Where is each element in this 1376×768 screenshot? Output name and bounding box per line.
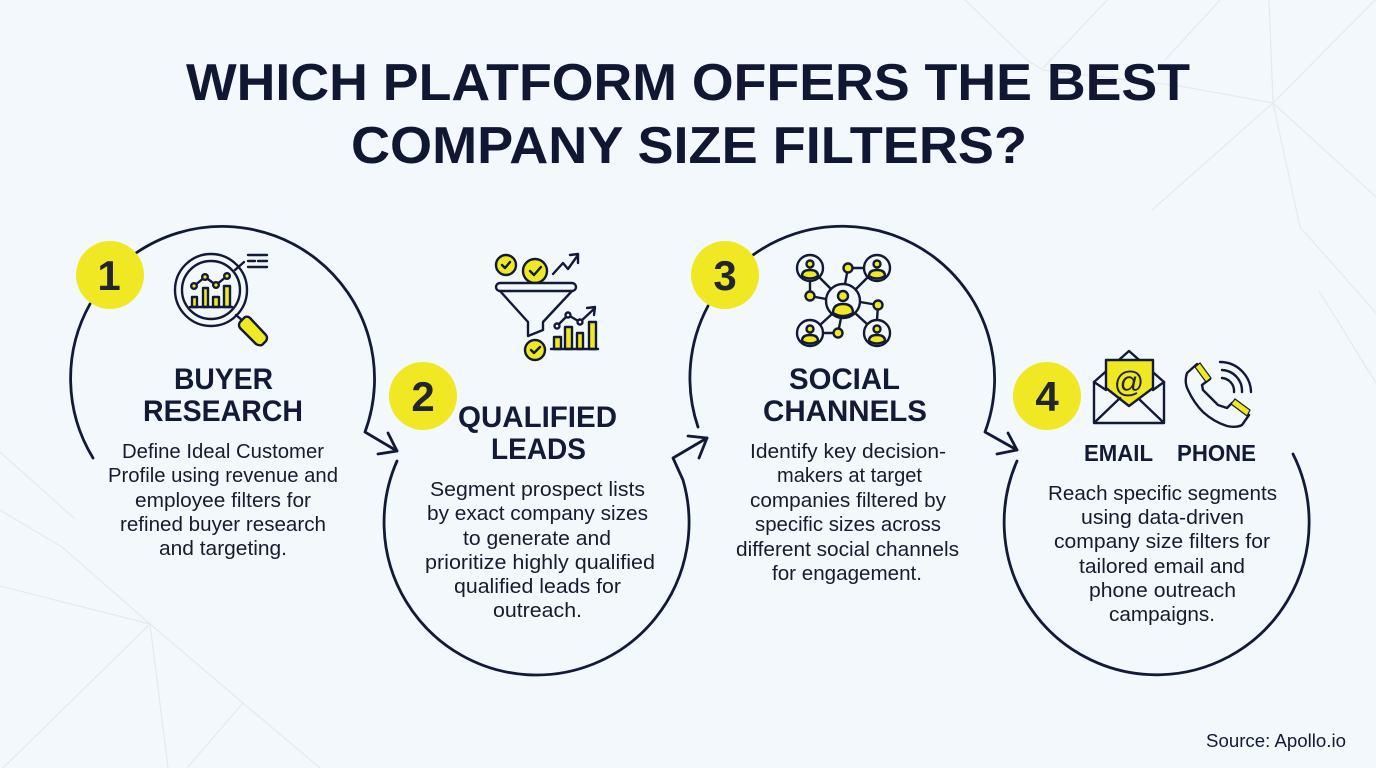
number badge 3: 3 bbox=[713, 252, 737, 299]
heading: buyer research: BUYER bbox=[174, 363, 273, 396]
text: step 4 description: company size filters for bbox=[1054, 530, 1270, 553]
text: step 3 description: companies filtered by bbox=[750, 489, 947, 512]
heading: email and phone: PHONE bbox=[1177, 440, 1256, 466]
icon: magnifier with chart bbox=[175, 254, 267, 345]
heading: buyer research: RESEARCH bbox=[143, 395, 303, 428]
text: step 1 description: employee filters for bbox=[135, 489, 311, 512]
icon: social network bbox=[797, 255, 890, 346]
text: step 4 description: tailored email and bbox=[1079, 555, 1245, 578]
text: step 4 description: campaigns. bbox=[1109, 603, 1215, 626]
heading: social channels: SOCIAL bbox=[789, 363, 900, 396]
title: COMPANY SIZE FILTERS? bbox=[351, 117, 1027, 175]
icon: envelope bbox=[1094, 351, 1164, 423]
number badge 4 bbox=[1013, 362, 1081, 430]
text: step 1 description: and targeting. bbox=[159, 537, 287, 560]
icon: phone bbox=[1186, 362, 1251, 427]
text: step 2 description: prioritize highly qualified bbox=[425, 551, 655, 574]
text: step 2 description: by exact company sizes bbox=[427, 502, 648, 525]
ring arc with arrow to step 4 bbox=[690, 226, 1017, 454]
title bbox=[186, 54, 1190, 175]
text: step 2 description bbox=[425, 478, 655, 622]
panel: step 4 email and phone bbox=[1004, 351, 1309, 675]
heading: qualified leads bbox=[458, 401, 617, 466]
text: step 2 description: to generate and bbox=[463, 527, 611, 550]
heading: email and phone bbox=[1084, 440, 1256, 466]
text: step 2 description: qualified leads for bbox=[454, 575, 621, 598]
text: step 2 description: outreach. bbox=[493, 599, 582, 622]
text: step 3 description: different social channels bbox=[736, 538, 959, 561]
icon: envelope: @ bbox=[1114, 366, 1144, 399]
icon: funnel with chart bbox=[496, 254, 598, 360]
text: step 2 description: Segment prospect lists bbox=[430, 478, 645, 501]
heading: email and phone: EMAIL bbox=[1084, 440, 1153, 466]
source note: Source: Apollo.io bbox=[1206, 731, 1346, 751]
text: step 3 description bbox=[736, 440, 959, 585]
ring arc bbox=[1004, 454, 1309, 675]
heading: social channels: CHANNELS bbox=[763, 395, 927, 428]
text: step 4 description: using data-driven bbox=[1081, 506, 1244, 529]
heading: social channels bbox=[763, 363, 927, 428]
text: step 1 description: refined buyer research bbox=[120, 513, 326, 536]
text: step 3 description: specific sizes across bbox=[755, 513, 941, 536]
number badge 3 bbox=[691, 241, 759, 309]
panel: step 2 qualified leads bbox=[384, 254, 707, 675]
text: step 3 description: makers at target bbox=[777, 464, 922, 487]
text: step 4 description: Reach specific segments bbox=[1048, 482, 1277, 505]
text: step 1 description: Define Ideal Customer bbox=[122, 440, 324, 463]
number badge 4: 4 bbox=[1035, 373, 1059, 420]
text: step 4 description bbox=[1048, 482, 1277, 626]
text: step 3 description: Identify key decision- bbox=[750, 440, 946, 463]
ring arc with arrow to step 2 bbox=[71, 226, 397, 458]
number badge 2: 2 bbox=[411, 373, 435, 420]
number badge 2 bbox=[389, 362, 457, 430]
text: step 1 description: Profile using revenue and bbox=[108, 464, 338, 487]
heading: qualified leads: QUALIFIED bbox=[458, 401, 617, 434]
number badge 1 bbox=[76, 241, 144, 309]
title: WHICH PLATFORM OFFERS THE BEST bbox=[186, 54, 1190, 112]
text: step 4 description: phone outreach bbox=[1089, 579, 1236, 602]
panel: step 3 social channels bbox=[690, 226, 1017, 585]
text: step 1 description bbox=[108, 440, 338, 560]
heading: qualified leads: LEADS bbox=[491, 433, 586, 466]
heading: buyer research bbox=[143, 363, 303, 428]
text: step 3 description: for engagement. bbox=[772, 562, 922, 585]
ring arc with arrow to step 3 bbox=[384, 436, 707, 675]
panel: step 1 buyer research bbox=[71, 226, 397, 560]
number badge 1: 1 bbox=[97, 252, 121, 299]
